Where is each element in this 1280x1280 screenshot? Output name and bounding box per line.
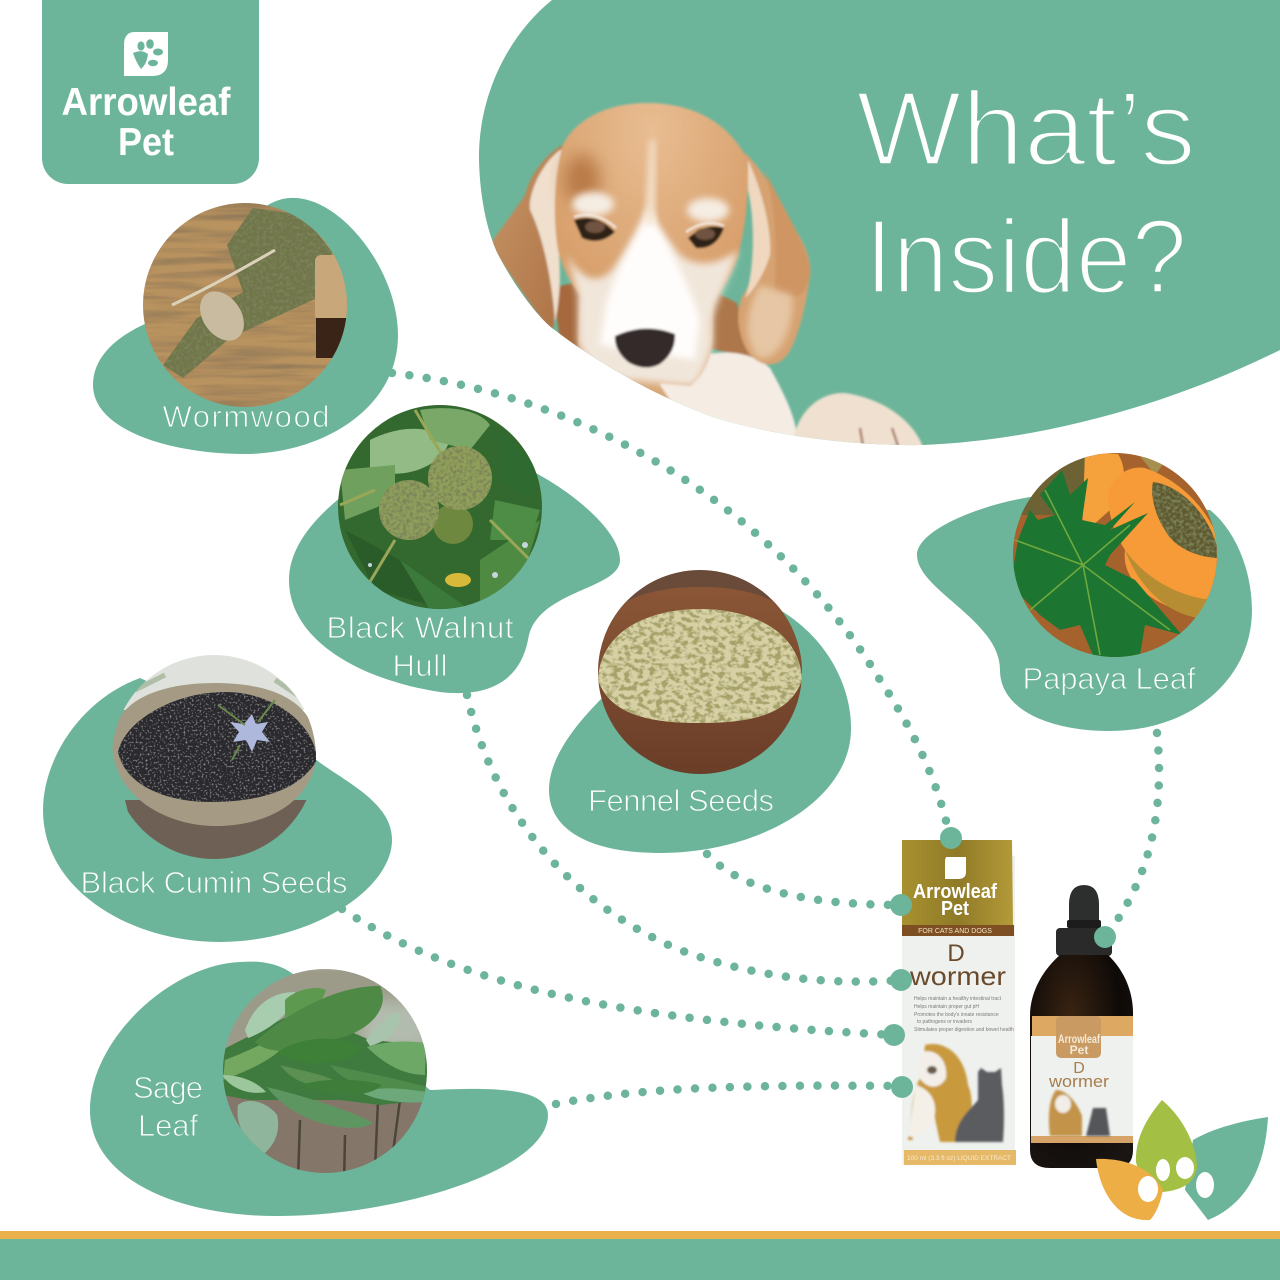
label: sage leaf: Leaf bbox=[138, 1108, 198, 1143]
photo: sage bbox=[220, 965, 430, 1185]
icon: leaf paw mark bbox=[1096, 1100, 1268, 1220]
connector: papaya bbox=[1105, 733, 1159, 937]
box product name bbox=[909, 940, 1006, 991]
label: black cumin seeds: Black Cumin Seeds bbox=[80, 865, 348, 900]
connector end dots bbox=[883, 827, 1116, 1098]
title: What’s bbox=[856, 70, 1196, 188]
bottle label logo: Arrowleaf bbox=[1058, 1032, 1101, 1046]
ingredient: fennel seeds bbox=[549, 568, 851, 853]
head bbox=[555, 103, 748, 386]
box bullets: Helps maintain proper gut pH bbox=[914, 1004, 979, 1010]
logo wordmark: Pet bbox=[118, 121, 174, 164]
ingredient: wormwood bbox=[93, 198, 398, 454]
box bullets: Helps maintain a healthy intestinal tract bbox=[914, 996, 1002, 1002]
bottle label logo: Pet bbox=[1070, 1043, 1088, 1057]
logo wordmark bbox=[62, 81, 231, 164]
logo wordmark: Arrowleaf bbox=[62, 81, 231, 124]
box logo: Arrowleaf bbox=[913, 881, 997, 903]
box dog and cat bbox=[908, 1044, 1004, 1142]
neck and chest bbox=[552, 280, 797, 440]
forehead stripe bbox=[645, 140, 655, 225]
right eye bbox=[686, 223, 724, 248]
icon: paw leaf bbox=[124, 32, 168, 76]
product: bottle bbox=[1030, 885, 1133, 1168]
bottle product name bbox=[1048, 1060, 1109, 1091]
beagle photo bbox=[490, 103, 923, 447]
left ear bbox=[490, 145, 562, 335]
label: fennel seeds: Fennel Seeds bbox=[588, 783, 774, 818]
footer band bbox=[0, 1231, 1280, 1280]
dark patch by left ear bbox=[564, 154, 600, 206]
ingredient: papaya leaf bbox=[917, 450, 1252, 731]
box logo: Pet bbox=[941, 898, 969, 920]
label: sage leaf bbox=[133, 1070, 203, 1143]
label: black walnut hull: Hull bbox=[392, 648, 448, 683]
brow patches bbox=[572, 192, 729, 222]
label: sage leaf: Sage bbox=[133, 1070, 203, 1105]
product: box: FOR CATS AND DOGS bbox=[918, 928, 992, 935]
logo panel bbox=[42, 0, 259, 184]
connector: wormwood bbox=[392, 373, 950, 838]
box logo bbox=[913, 857, 997, 920]
connector: black cumin bbox=[342, 909, 894, 1035]
product: box bbox=[902, 840, 1016, 1165]
label: black walnut hull: Black Walnut bbox=[326, 610, 514, 645]
box product name: wormer bbox=[909, 961, 1006, 991]
box bullets: Stimulates proper digestion and bowel health bbox=[914, 1027, 1014, 1033]
bottle product name: wormer bbox=[1048, 1072, 1109, 1091]
nose bbox=[615, 328, 675, 368]
product: box: 100 ml (3.3 fl oz) LIQUID EXTRACT bbox=[907, 1155, 1011, 1162]
box bullets bbox=[914, 996, 1014, 1033]
label: black walnut hull bbox=[326, 610, 514, 683]
box bullets: to pathogens or invaders bbox=[917, 1019, 973, 1025]
header panel bbox=[479, 0, 1280, 445]
foliage base bbox=[222, 1010, 428, 1105]
photo: papaya bbox=[1010, 450, 1220, 660]
left eye bbox=[574, 215, 616, 241]
bottle dog and cat bbox=[1049, 1090, 1110, 1136]
box product name: D bbox=[947, 940, 965, 967]
photo: wormwood bbox=[140, 200, 350, 410]
lower face bbox=[567, 205, 738, 386]
ingredient: sage leaf bbox=[90, 962, 548, 1216]
right ear bbox=[738, 153, 810, 364]
ingredient: black cumin seeds bbox=[43, 650, 392, 942]
box bullets: Promotes the body's innate resistance bbox=[914, 1012, 999, 1018]
bottle label logo bbox=[1056, 1016, 1101, 1058]
title bbox=[856, 70, 1196, 316]
bottle product name: D bbox=[1073, 1060, 1085, 1077]
ingredient: black walnut hull bbox=[289, 400, 620, 693]
paw bbox=[793, 393, 923, 447]
photo: fennel bbox=[595, 568, 805, 775]
label: wormwood: Wormwood bbox=[162, 399, 330, 434]
connector: sage bbox=[556, 1086, 901, 1104]
connector: fennel bbox=[707, 854, 901, 905]
title: Inside? bbox=[865, 198, 1187, 316]
label: papaya leaf: Papaya Leaf bbox=[1022, 661, 1196, 696]
connector: black walnut bbox=[467, 695, 901, 982]
white blaze bbox=[600, 215, 700, 360]
photo: black cumin bbox=[110, 650, 320, 860]
photo: black walnut bbox=[335, 400, 545, 610]
